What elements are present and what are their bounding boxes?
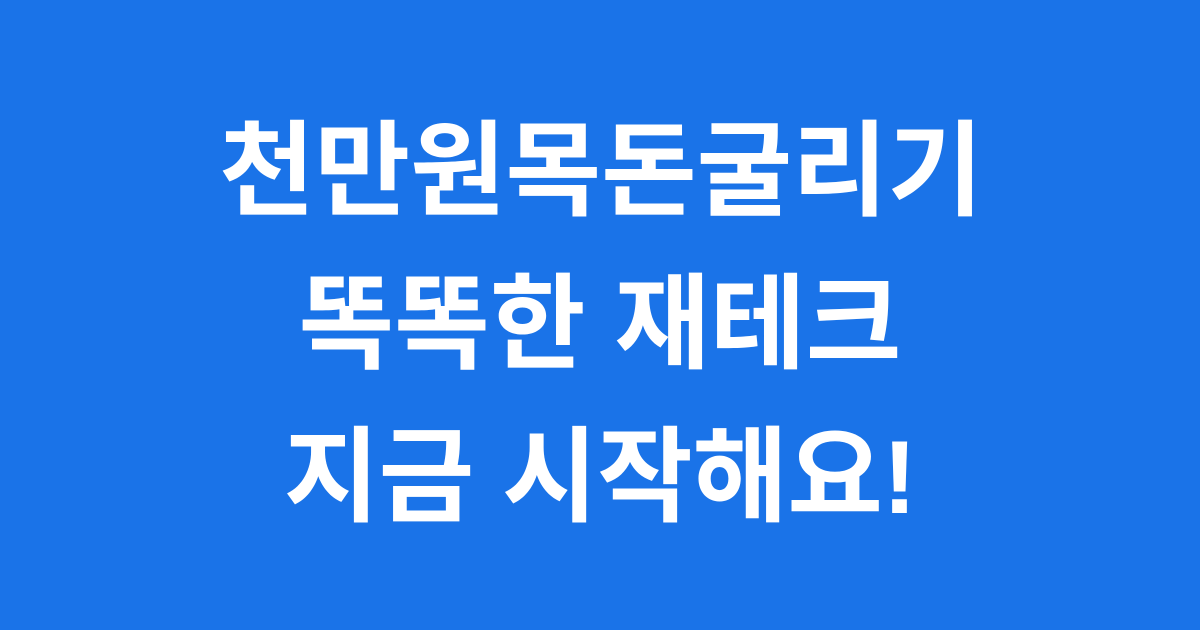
title line 2: 똑똑한 재테크 bbox=[298, 267, 901, 383]
title line 1: 천만원목돈굴리기 bbox=[219, 114, 983, 230]
title line 3: 지금 시작해요! bbox=[284, 420, 916, 536]
